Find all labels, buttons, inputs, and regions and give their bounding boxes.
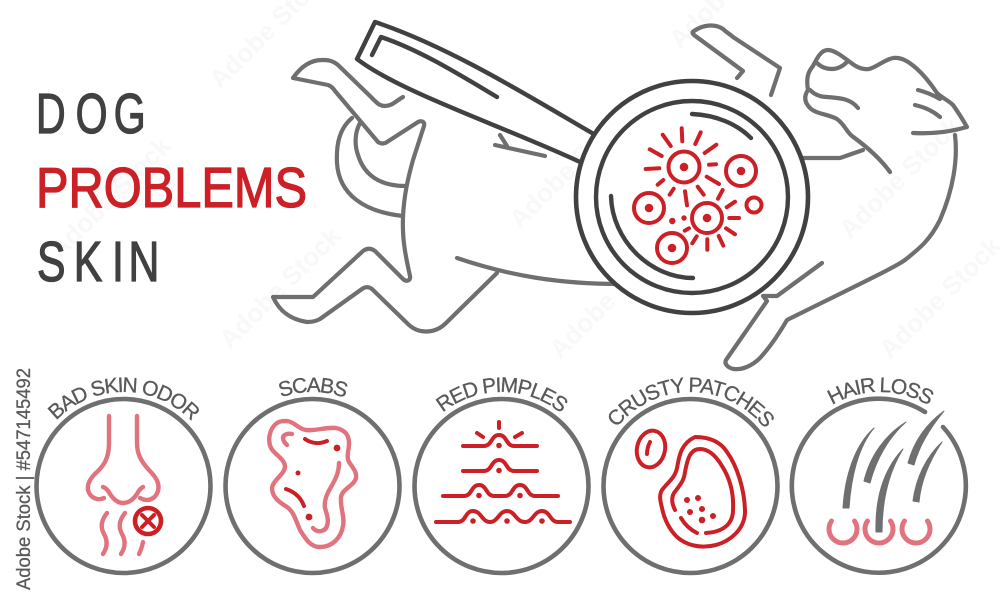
title line: SKIN: SKIN bbox=[37, 229, 159, 293]
icon: pimple rows bbox=[436, 422, 570, 524]
vertical stock credit: Adobe Stock | #547145492 bbox=[14, 368, 35, 590]
title bbox=[36, 81, 307, 293]
panel: bad skin odor bbox=[34, 377, 213, 576]
icon: crusty patch bbox=[633, 428, 745, 547]
panel: hair loss bbox=[790, 377, 968, 575]
icon: scab outline bbox=[269, 421, 356, 547]
dog illustration bbox=[273, 25, 967, 369]
watermark: Adobe Stock bbox=[833, 110, 967, 244]
head bbox=[807, 50, 967, 133]
icon: scab inner fold bbox=[313, 463, 339, 531]
title line: DOG: DOG bbox=[36, 81, 146, 146]
back bbox=[725, 135, 956, 369]
watermark: Adobe Stock bbox=[213, 220, 347, 354]
upper lip bbox=[810, 90, 858, 108]
skin lesions bbox=[634, 128, 762, 263]
icon: scab marks bbox=[286, 439, 340, 520]
watermark: Adobe Stock bbox=[503, 100, 637, 234]
icon: no sign bbox=[135, 508, 161, 534]
label: SCABS bbox=[279, 378, 348, 397]
raised front leg bbox=[692, 25, 780, 95]
watermark bbox=[43, 0, 1000, 364]
icon: follicles bbox=[829, 521, 930, 543]
fur mark bbox=[495, 135, 545, 156]
label: HAIR LOSS bbox=[827, 377, 934, 404]
panel: scabs bbox=[223, 378, 402, 576]
icon: odor waves bbox=[102, 513, 143, 554]
label: RED PIMPLES bbox=[436, 377, 568, 412]
title line: PROBLEMS: PROBLEMS bbox=[36, 156, 307, 220]
watermark: Adobe Stock bbox=[543, 230, 677, 364]
jaw and cheek bbox=[805, 90, 890, 172]
watermark: Adobe Stock bbox=[43, 130, 177, 264]
lens glare bbox=[692, 114, 751, 138]
magnifier handle bbox=[357, 22, 592, 162]
panel: crusty patches bbox=[601, 377, 780, 576]
handle highlight bbox=[372, 37, 497, 97]
hind leg upper and rump bbox=[273, 60, 497, 332]
tail bbox=[337, 118, 403, 216]
neck bbox=[803, 150, 863, 158]
belly line bbox=[457, 258, 620, 284]
nose line bbox=[817, 62, 847, 69]
panel: red pimples bbox=[412, 377, 591, 576]
icon: nose bbox=[88, 416, 159, 503]
label: BAD SKIN ODOR bbox=[48, 377, 199, 421]
magnifying glass bbox=[576, 81, 808, 313]
open ring bbox=[792, 399, 966, 573]
label: CRUSTY PATCHES bbox=[608, 377, 774, 426]
icon: hairs bbox=[843, 411, 944, 532]
ear lines bbox=[918, 90, 940, 99]
